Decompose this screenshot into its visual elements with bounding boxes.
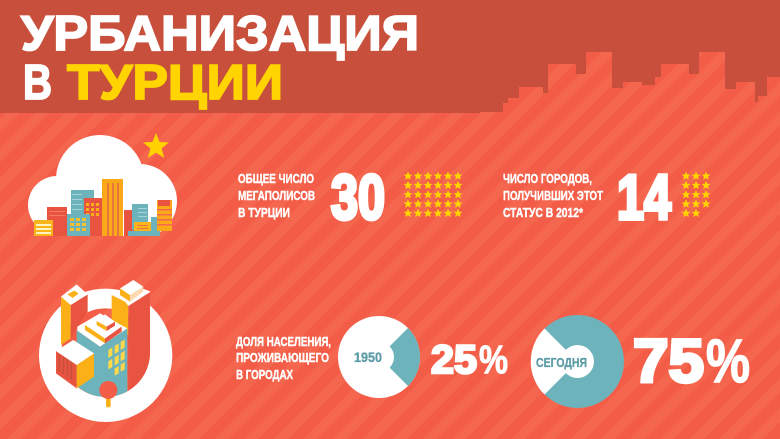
pie chart 1950: [338, 316, 420, 398]
star: [143, 133, 169, 158]
title: [21, 7, 419, 110]
right tower: [112, 280, 151, 391]
number 14: 14: [617, 163, 671, 233]
white ring: [39, 289, 172, 422]
title: УРБАНИЗАЦИЯ: [21, 7, 419, 61]
text: urban population share: ДОЛЯ НАСЕЛЕНИЯ,: [236, 335, 331, 349]
header band with city skyline edge: [0, 0, 780, 113]
text: urban population share: В ГОРОДАХ: [236, 368, 294, 382]
tree: [99, 381, 117, 407]
text: cities gaining status in 2012: ЧИСЛО ГОРОДОВ,: [503, 172, 592, 186]
label 1950: 1950: [354, 350, 382, 365]
text: urban population share: [236, 335, 331, 382]
buildings: [34, 179, 172, 236]
label today: СЕГОДНЯ: [536, 355, 587, 370]
stars: 14: [682, 172, 710, 217]
pie chart today: [531, 315, 624, 408]
text: cities gaining status in 2012: [503, 172, 603, 220]
value 75%: [633, 327, 750, 395]
text: total metropolises: ОБЩЕЕ ЧИСЛО: [238, 172, 314, 186]
left tower: [61, 284, 88, 345]
text: urban population share: ПРОЖИВАЮЩЕГО: [236, 351, 329, 365]
text: total metropolises: МЕГАПОЛИСОВ: [238, 189, 315, 203]
number 30: 30: [331, 163, 385, 233]
value 75%: 75: [633, 327, 704, 395]
front box: [56, 340, 94, 388]
text: total metropolises: [238, 172, 315, 220]
value 25%: %: [479, 338, 508, 382]
windows: [108, 339, 125, 376]
title: ТУРЦИИ: [67, 56, 283, 110]
title: В: [23, 56, 52, 110]
cloud: [28, 135, 177, 238]
stars: 30: [404, 172, 462, 217]
text: cities gaining status in 2012: СТАТУС В 2012*: [503, 206, 583, 220]
value 75%: %: [706, 327, 750, 395]
icon: city in a cloud with star: [28, 133, 177, 238]
icon: isometric buildings in a white ring: [39, 280, 172, 422]
text: total metropolises: В ТУРЦИИ: [238, 206, 290, 220]
value 25%: [431, 338, 508, 382]
value 25%: 25: [431, 338, 477, 382]
text: cities gaining status in 2012: ПОЛУЧИВШИХ ЭТОТ: [503, 189, 603, 203]
central building: [77, 313, 127, 397]
